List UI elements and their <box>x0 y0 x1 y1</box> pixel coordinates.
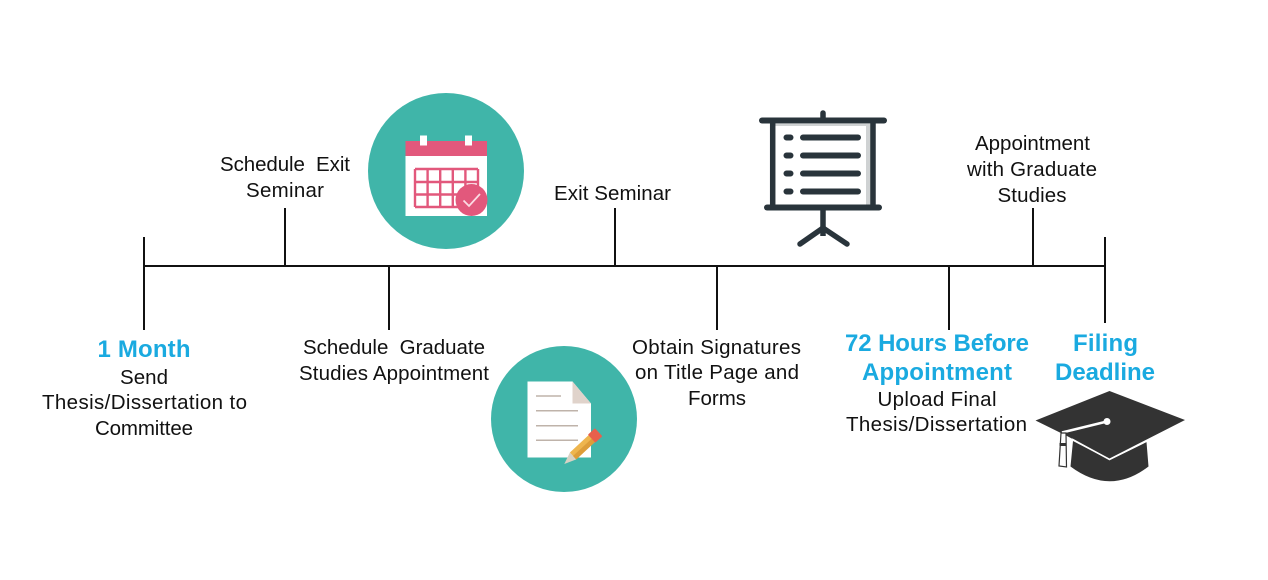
icon: graduation cap <box>1036 391 1185 481</box>
milestone: Appointment with Graduate Studies <box>966 132 1097 207</box>
milestone: 72 Hours Before Appointment: 72 Hours Before <box>845 330 1029 357</box>
milestone: Schedule Graduate Studies Appointment: Schedule Graduate <box>303 336 485 359</box>
milestone: Schedule Exit Seminar <box>220 153 350 202</box>
milestone: Appointment with Graduate Studies: with Graduate <box>966 158 1097 181</box>
milestone: Schedule Exit Seminar: Seminar <box>246 179 324 202</box>
milestone: Obtain Signatures <box>632 336 801 410</box>
milestone: 72 Hours Before Appointment <box>845 330 1029 436</box>
icon: presentation screen <box>762 113 884 244</box>
milestone: Obtain Signatures: Forms <box>688 387 746 410</box>
milestone: Appointment with Graduate Studies: Appointment <box>975 132 1090 155</box>
milestone: Filing Deadline <box>1055 330 1155 386</box>
milestone: 1 Month <box>42 336 247 440</box>
milestone: Obtain Signatures: Obtain Signatures <box>632 336 801 359</box>
milestone: Schedule Exit Seminar: Schedule Exit <box>220 153 350 176</box>
milestone: 1 Month: 1 Month <box>98 336 190 363</box>
icon: document with pencil <box>491 346 637 492</box>
milestone: 72 Hours Before Appointment: Appointment <box>862 359 1012 386</box>
milestone: Schedule Graduate Studies Appointment: Studies Appointment <box>299 362 489 385</box>
milestone: 1 Month: Send <box>120 366 168 389</box>
milestone: Filing Deadline: Deadline <box>1055 359 1155 386</box>
milestone: Obtain Signatures: on Title Page and <box>635 361 799 384</box>
milestone: Exit Seminar: Exit Seminar <box>554 182 671 205</box>
milestone: 72 Hours Before Appointment: Upload Final <box>878 388 996 411</box>
milestone: 72 Hours Before Appointment: Thesis/Dissertation <box>846 413 1027 436</box>
timeline axis with ticks <box>144 208 1105 330</box>
milestone: 1 Month: Thesis/Dissertation to <box>42 391 247 414</box>
milestone: Schedule Graduate Studies Appointment <box>299 336 489 385</box>
icon: calendar <box>368 93 524 249</box>
milestone: 1 Month: Committee <box>95 417 193 440</box>
milestone: Filing Deadline: Filing <box>1073 330 1138 357</box>
milestone: Appointment with Graduate Studies: Studies <box>998 184 1066 207</box>
